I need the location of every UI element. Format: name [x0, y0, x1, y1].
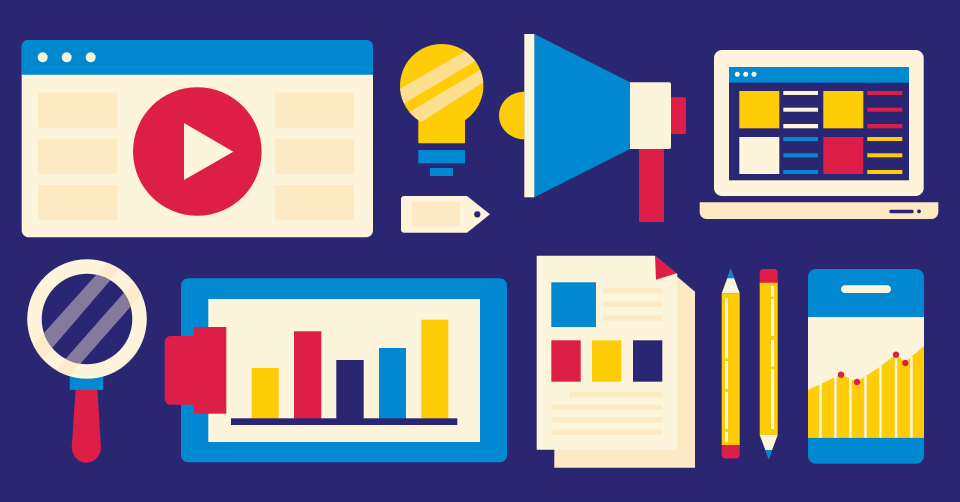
panel: document — [537, 256, 695, 468]
icon: price tag — [401, 196, 490, 233]
left content blocks — [38, 93, 117, 220]
icon: light bulb — [400, 44, 484, 176]
panel: clipboard bar chart — [165, 278, 507, 462]
folded corner — [655, 256, 677, 280]
icon: megaphone — [499, 34, 686, 222]
chart gridlines — [819, 355, 913, 438]
icon: pencil pointing down — [760, 269, 778, 459]
heading lines — [603, 288, 662, 321]
laptop base — [700, 202, 938, 219]
panel: smartphone with chart — [808, 269, 924, 464]
coloured blocks — [551, 340, 662, 382]
blue image block — [551, 282, 596, 327]
panel: video browser window — [22, 40, 373, 237]
screen text lines — [783, 91, 902, 174]
laptop window dots — [735, 72, 756, 77]
body lines — [552, 392, 662, 435]
data points — [838, 352, 908, 385]
icon: pencil pointing up — [722, 269, 740, 458]
area chart — [808, 346, 924, 438]
speaker slot — [841, 285, 891, 293]
right content blocks — [275, 93, 354, 220]
icon: play button — [133, 87, 262, 216]
browser title bar — [22, 40, 373, 75]
panel: laptop — [700, 50, 938, 219]
window dots — [38, 52, 96, 62]
laptop browser bar — [729, 67, 909, 83]
icon: magnifying glass — [27, 259, 147, 463]
screen tiles — [739, 91, 863, 174]
bar chart — [231, 320, 457, 425]
clipboard clip — [165, 327, 226, 414]
